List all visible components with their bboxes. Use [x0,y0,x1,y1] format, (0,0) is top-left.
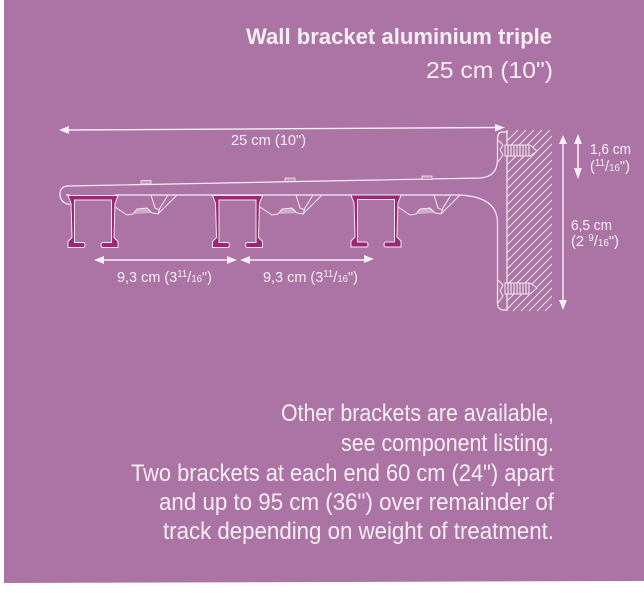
label: first 9,3 cm: 11 [177,269,188,280]
label: 6,5 cm [571,217,619,250]
label: 1,6 cm: / [605,158,610,175]
label: 6,5 cm: 16") [598,233,619,250]
label: 6,5 cm: 6,5 cm [571,217,612,234]
label: 6,5 cm: / [594,233,599,250]
arrow: second 9,3 cm spacing [240,255,374,264]
body text: track depending on weight of treatment. [163,518,554,545]
label: 1,6 cm: ( [590,158,595,175]
label: 6,5 cm: (2 [571,233,584,250]
label: 1,6 cm [590,141,631,175]
clip 2 [260,195,322,215]
label: first 9,3 cm: 16") [191,269,212,286]
bracket technical drawing [60,130,552,311]
top tabs [141,176,432,184]
label: second 9,3 cm: 11 [323,269,334,280]
body text: Other brackets are available, [281,400,554,427]
label: 1,6 cm: 11 [595,158,605,169]
track channel 3 [351,195,401,247]
body text [131,400,554,545]
label: second 9,3 cm: 16") [337,269,358,286]
label: 6,5 cm: 9 [588,233,594,244]
bottom screw [505,283,537,294]
body text: see component listing. [341,430,554,457]
arrow: first 9,3 cm spacing [94,256,237,264]
bracket outline [60,132,507,310]
track channel 1 [68,196,118,248]
label: second 9,3 cm: / [333,269,338,286]
clip 1 [115,195,177,215]
label: first 9,3 cm: 9,3 cm (3 [117,269,180,286]
top screw [505,145,537,156]
label: 1,6 cm: 16") [609,158,630,175]
wall hatching [507,130,552,311]
label: 1,6 cm: 1,6 cm [590,141,631,158]
arrow: 25 cm overall width [59,124,505,134]
subtitle: 25 cm (10") [426,57,553,83]
body text: Two brackets at each end 60 cm (24") apart [131,460,554,487]
label: second 9,3 cm: 9,3 cm (3 [263,269,326,286]
arrow: 1,6 cm height [574,134,582,179]
label: 25 cm: 25 cm (10") [231,132,306,149]
clip 3 [398,195,460,215]
body text: and up to 95 cm (36") over remainder of [159,489,554,516]
title: Wall bracket aluminium triple [246,24,552,49]
track channel 2 [212,196,262,248]
label: first 9,3 cm: / [187,269,192,286]
arrow: 6,5 cm height [559,135,567,310]
